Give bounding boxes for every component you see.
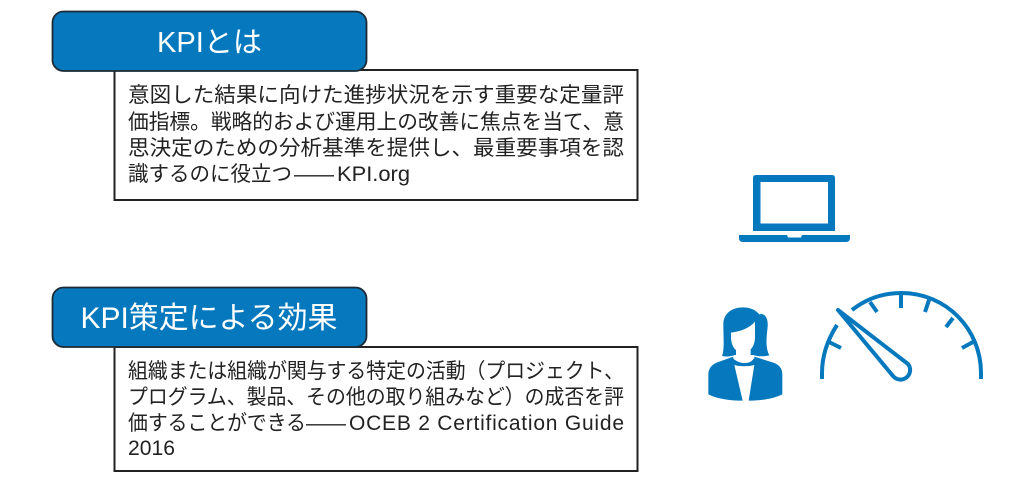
- definition text: [128, 84, 624, 186]
- panel: KPI effects body: [114, 347, 638, 471]
- panel: KPI definition body: [114, 70, 638, 200]
- definition text: 識するのに役立つ: [128, 163, 292, 186]
- icon: speedometer gauge: [822, 293, 981, 380]
- icon: person: [708, 307, 782, 401]
- heading: KPI策定による効果: [52, 288, 366, 347]
- heading: KPIとは: KPIとは: [157, 27, 262, 59]
- definition text: 思決定のための分析基準を提供し、最重要事項を認: [128, 137, 624, 160]
- effects text: プログラム、製品、その他の取り組みなど）の成否を評: [128, 386, 624, 409]
- effects text: 価することができる: [128, 412, 306, 435]
- heading: KPI策定による効果: KPI策定による効果: [80, 302, 338, 335]
- effects text: 組織または組織が関与する特定の活動（プロジェクト、: [128, 360, 624, 383]
- definition text: KPI.org: [337, 163, 410, 186]
- definition text: 価指標。戦略的および運用上の改善に焦点を当て、意: [128, 111, 624, 134]
- effects text: 2016: [128, 437, 175, 460]
- effects text: ――: [306, 412, 346, 435]
- icon: laptop: [739, 175, 850, 242]
- effects text: [128, 360, 624, 460]
- effects text: OCEB 2 Certification Guide: [349, 412, 624, 435]
- definition text: ――: [294, 163, 334, 186]
- heading: KPIとは: [52, 12, 366, 71]
- definition text: 意図した結果に向けた進捗状況を示す重要な定量評: [128, 84, 624, 107]
